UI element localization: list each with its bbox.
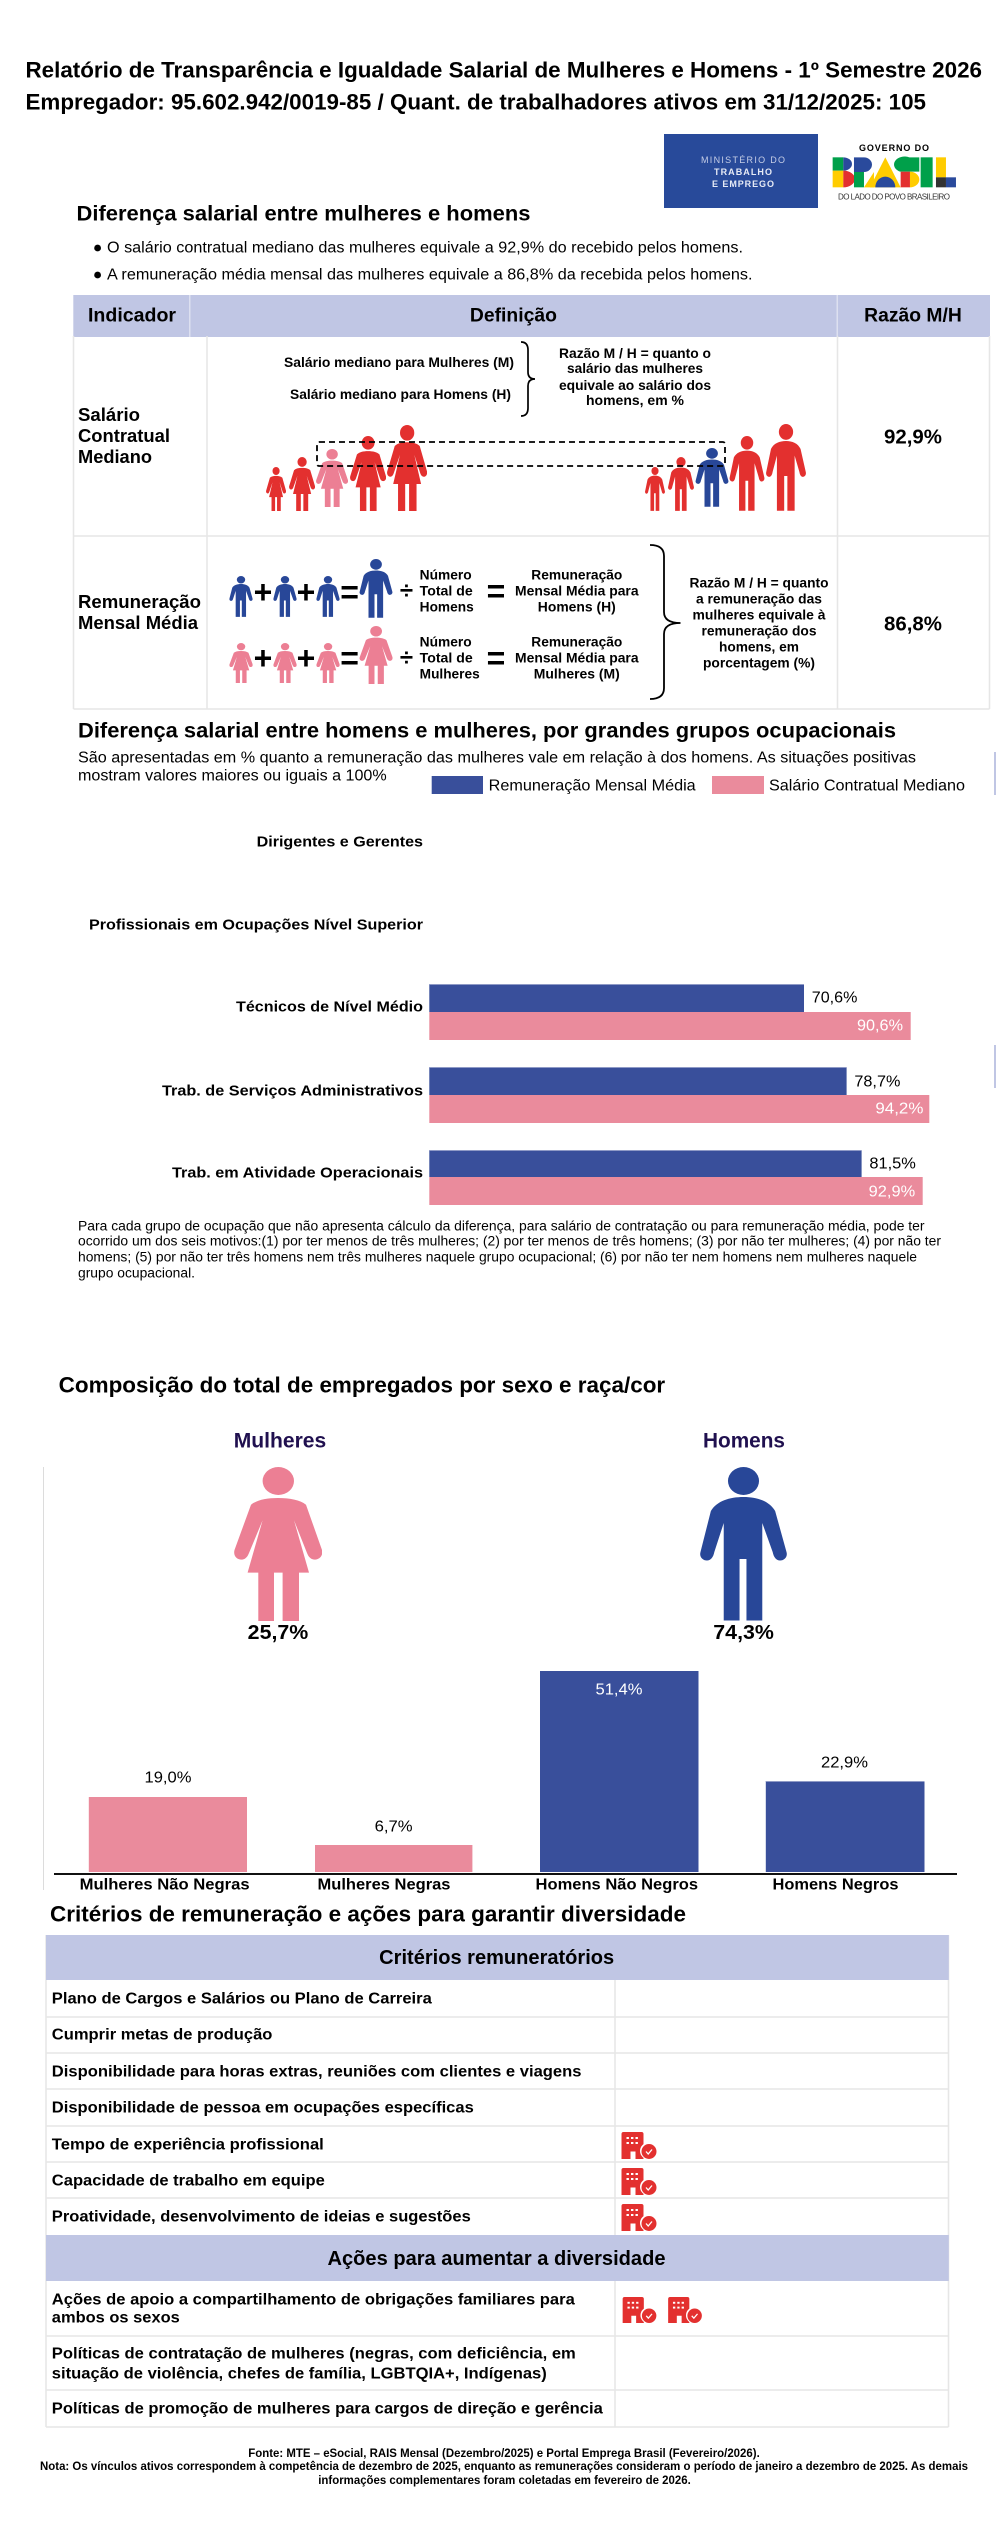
note: motives: homens; (5) por não ter três homens nem três mulheres naquele grupo ocupacional; (6) por não ter nem homens nem mulheres naquele xyxy=(78,1250,917,1264)
definition: razão M/H remuneração: remuneração dos xyxy=(702,624,816,638)
definition: razão M/H salário: Razão M / H = quanto o xyxy=(559,345,711,361)
bar: homens negros: 22,9% xyxy=(821,1754,868,1772)
icons: men ordered by salary xyxy=(645,424,806,511)
icons: company check marks xyxy=(622,2132,657,2232)
definition: razão M/H remuneração: homens, em xyxy=(719,640,799,654)
criteria rows: Tempo de experiência profissional xyxy=(52,2136,324,2154)
panel: indicator table xyxy=(73,295,990,709)
definition: razão M/H salário: equivale ao salário dos xyxy=(559,377,711,393)
bar: homens não negros: 51,4% xyxy=(596,1682,642,1698)
median salary labels xyxy=(284,354,514,402)
group: atividade operacional: Trab. em Atividade Operacionais xyxy=(172,1164,423,1182)
row label: salário contratual mediano: Salário xyxy=(78,405,140,425)
equation: women: Remuneração xyxy=(531,634,622,650)
legend xyxy=(432,776,965,794)
bar: mulheres negras xyxy=(315,1818,472,1894)
criteria rows: Disponibilidade de pessoa em ocupações específicas xyxy=(52,2100,474,2116)
bar: homens não negros xyxy=(536,1671,698,1894)
group: técnicos xyxy=(236,984,911,1040)
logo: Governo do Brasil: DO LADO DO POVO BRASILEIRO xyxy=(838,192,950,202)
title: Relatório de Transparência e Igualdade Salarial de Mulheres e Homens - 1º Semestre 2026 xyxy=(26,58,982,82)
definition: razão M/H remuneração: mulheres equivale à xyxy=(692,608,826,622)
logo: Ministério do Trabalho e Emprego xyxy=(664,134,818,208)
group: profissionais: Profissionais em Ocupações Nível Superior xyxy=(89,916,423,934)
equation: men: + xyxy=(254,574,272,610)
definition: razão M/H salário: homens, em % xyxy=(586,392,685,408)
footer: source and note: informações complementares foram coletadas em fevereiro de 2026. xyxy=(318,2475,691,2487)
table header xyxy=(73,295,990,337)
action rows: Ações de apoio a compartilhamento de obrigações familiares para xyxy=(52,2292,575,2308)
panel: women share: 25,7% xyxy=(248,1622,309,1644)
group: dirigentes: Dirigentes e Gerentes xyxy=(257,834,423,850)
header: ações: Ações para aumentar a diversidade xyxy=(328,2248,666,2270)
logo: Ministério do Trabalho e Emprego: TRABALHO xyxy=(714,167,772,177)
bar: mulheres não negras: 19,0% xyxy=(144,1770,192,1786)
equation: women: + xyxy=(254,640,272,676)
bar: mulheres negras: 6,7% xyxy=(375,1818,413,1836)
definition: razão M/H remuneração xyxy=(690,576,828,670)
icons: women ordered by salary xyxy=(266,425,427,511)
criteria rows: Disponibilidade para horas extras, reuniões com clientes e viagens xyxy=(52,2064,582,2080)
bar chart: occupational groups xyxy=(89,834,929,1205)
median salary labels: Salário mediano para Mulheres (M) xyxy=(284,354,514,370)
group: serviços administrativos: 78,7% xyxy=(854,1074,900,1090)
bullet points: A remuneração média mensal das mulheres equivale a 86,8% da recebida pelos homens. xyxy=(107,266,752,284)
note: motives: grupo ocupacional. xyxy=(78,1266,195,1280)
logo: Governo do Brasil xyxy=(833,143,956,202)
footer: source and note: Nota: Os vínculos ativos correspondem à competência de dezembro de 2025, enquanto as remunerações consideram o período de janeiro a dezembro de 2025. As demais xyxy=(40,2461,968,2473)
dashed comparison box xyxy=(317,442,725,466)
group: atividade operacional: 92,9% xyxy=(869,1184,915,1200)
action rows xyxy=(52,2292,603,2418)
heading: diferença salarial: Diferença salarial entre mulheres e homens xyxy=(76,202,530,226)
title: Empregador: 95.602.942/0019-85 / Quant. de trabalhadores ativos em 31/12/2025: 105 xyxy=(26,90,926,114)
group: serviços administrativos: 94,2% xyxy=(875,1100,923,1118)
panel: men share xyxy=(700,1430,787,1644)
equation: men xyxy=(229,559,639,618)
group: atividade operacional xyxy=(172,1150,923,1205)
row label: salário contratual mediano xyxy=(78,405,170,467)
criteria rows: Plano de Cargos e Salários ou Plano de Carreira xyxy=(52,1990,432,2008)
bar: homens negros: Homens Negros xyxy=(772,1876,898,1894)
definition: razão M/H salário xyxy=(559,345,711,408)
heading: composição: Composição do total de empregados por sexo e raça/cor xyxy=(59,1372,666,1398)
heading: critérios: Critérios de remuneração e ações para garantir diversidade xyxy=(50,1902,686,1926)
action rows: situação de violência, chefes de família, LGBTQIA+, Indígenas) xyxy=(52,2366,547,2382)
row label: remuneração mensal média: Mensal Média xyxy=(78,613,199,633)
logo: Governo do Brasil: GOVERNO DO xyxy=(859,143,929,153)
action rows: Políticas de contratação de mulheres (negras, com deficiência, em xyxy=(52,2346,576,2362)
intro text: mostram valores maiores ou iguais a 100% xyxy=(78,768,387,784)
group: técnicos: 70,6% xyxy=(812,990,857,1006)
equation: women: Mensal Média para xyxy=(515,650,639,666)
brace xyxy=(521,342,535,416)
note: motives: Para cada grupo de ocupação que não apresenta cálculo da diferença, para salário de contratação ou para remuneração média, pode ter xyxy=(78,1218,925,1234)
definition: razão M/H remuneração: Razão M / H = quanto xyxy=(690,576,828,590)
header: critérios remuneratórios xyxy=(46,1935,949,1980)
panel: criteria table xyxy=(46,1935,949,2427)
panel: women share: Mulheres xyxy=(234,1430,326,1452)
legend: Salário Contratual Mediano xyxy=(769,778,965,794)
equation: women: Mulheres (M) xyxy=(534,666,620,682)
bar: homens negros xyxy=(766,1754,924,1894)
header: ações xyxy=(46,2235,949,2281)
group: serviços administrativos xyxy=(162,1067,929,1123)
panel: men share: 74,3% xyxy=(713,1622,774,1644)
group: serviços administrativos: Trab. de Serviços Administrativos xyxy=(162,1082,423,1100)
note: motives xyxy=(78,1218,942,1280)
big brace xyxy=(650,545,680,699)
logo: Ministério do Trabalho e Emprego: MINISTÉRIO DO xyxy=(701,155,785,165)
bullet points: O salário contratual mediano das mulheres equivale a 92,9% do recebido pelos homens. xyxy=(107,240,743,256)
definition: razão M/H salário: salário das mulheres xyxy=(567,360,703,376)
equation: men: ÷ xyxy=(400,578,413,604)
definition: razão M/H remuneração: a remuneração das xyxy=(696,592,822,606)
equation: women: Total de xyxy=(420,650,473,666)
bar: mulheres não negras xyxy=(80,1770,250,1894)
equation: men: Mensal Média para xyxy=(515,584,639,598)
heading: grupos ocupacionais: Diferença salarial entre homens e mulheres, por grandes grupos ocupacionais xyxy=(78,720,896,742)
bar chart: composition xyxy=(43,1467,957,1894)
icons: company check marks, actions xyxy=(623,2297,702,2323)
title xyxy=(26,58,982,114)
bar: mulheres não negras: Mulheres Não Negras xyxy=(80,1876,250,1894)
table header: Indicador xyxy=(88,306,177,326)
row label: salário contratual mediano: Contratual xyxy=(78,426,170,446)
equation: men: Remuneração xyxy=(531,568,622,582)
footer: source and note: Fonte: MTE – eSocial, RAIS Mensal (Dezembro/2025) e Portal Emprega Brasil (Fevereiro/2026). xyxy=(248,2448,760,2460)
logo: Ministério do Trabalho e Emprego: E EMPREGO xyxy=(712,179,774,189)
row label: remuneração mensal média: Remuneração xyxy=(78,592,201,612)
header: critérios remuneratórios: Critérios remuneratórios xyxy=(379,1947,614,1969)
equation: men: = xyxy=(340,574,359,610)
equation: men: Homens (H) xyxy=(538,600,616,614)
legend: Remuneração Mensal Média xyxy=(489,778,696,794)
action rows: ambos os sexos xyxy=(52,2310,180,2326)
definition: razão M/H remuneração: porcentagem (%) xyxy=(703,656,815,670)
bar: mulheres negras: Mulheres Negras xyxy=(318,1876,450,1894)
equation: men: + xyxy=(297,574,315,610)
intro text: São apresentadas em % quanto a remuneração das mulheres vale em relação à dos homens. As situações positivas xyxy=(78,750,916,766)
equation: women: Número xyxy=(420,634,472,650)
criteria rows xyxy=(52,1990,582,2226)
panel: men share: Homens xyxy=(703,1430,785,1452)
footer: source and note xyxy=(40,2448,968,2487)
table header: Razão M/H xyxy=(864,306,962,326)
equation: men: = xyxy=(487,573,505,609)
criteria rows: Cumprir metas de produção xyxy=(52,2026,272,2044)
action rows: Políticas de promoção de mulheres para cargos de direção e gerência xyxy=(52,2400,603,2418)
value: 92,9%: 92,9% xyxy=(884,426,942,448)
equation: men: Total de xyxy=(420,584,473,598)
median salary labels: Salário mediano para Homens (H) xyxy=(290,386,511,402)
table header: Definição xyxy=(470,306,557,326)
equation: women: Mulheres xyxy=(420,666,480,682)
group: atividade operacional: 81,5% xyxy=(869,1156,916,1172)
row label: salário contratual mediano: Mediano xyxy=(78,447,152,467)
equation: women: + xyxy=(297,640,315,676)
group: técnicos: 90,6% xyxy=(857,1018,903,1034)
equation: men: Número xyxy=(420,568,472,582)
bar: homens não negros: Homens Não Negros xyxy=(536,1876,698,1894)
equation: women: = xyxy=(340,640,359,676)
equation: men: Homens xyxy=(420,600,474,614)
equation: women: ÷ xyxy=(400,644,413,672)
criteria rows: Proatividade, desenvolvimento de ideias e sugestões xyxy=(52,2208,471,2226)
row label: remuneração mensal média xyxy=(78,592,201,633)
group: técnicos: Técnicos de Nível Médio xyxy=(236,998,423,1016)
panel: women share xyxy=(234,1430,326,1644)
note: motives: ocorrido um dos seis motivos:(1) por ter menos de três mulheres; (2) por ter menos de três homens; (3) por não ter mulheres; (4) por não ter xyxy=(78,1234,942,1248)
equation: women xyxy=(229,626,639,684)
value: 86,8%: 86,8% xyxy=(884,612,942,636)
bullet points xyxy=(94,240,752,284)
equation: women: = xyxy=(487,640,505,676)
intro text xyxy=(78,750,916,784)
criteria rows: Capacidade de trabalho em equipe xyxy=(52,2172,325,2190)
